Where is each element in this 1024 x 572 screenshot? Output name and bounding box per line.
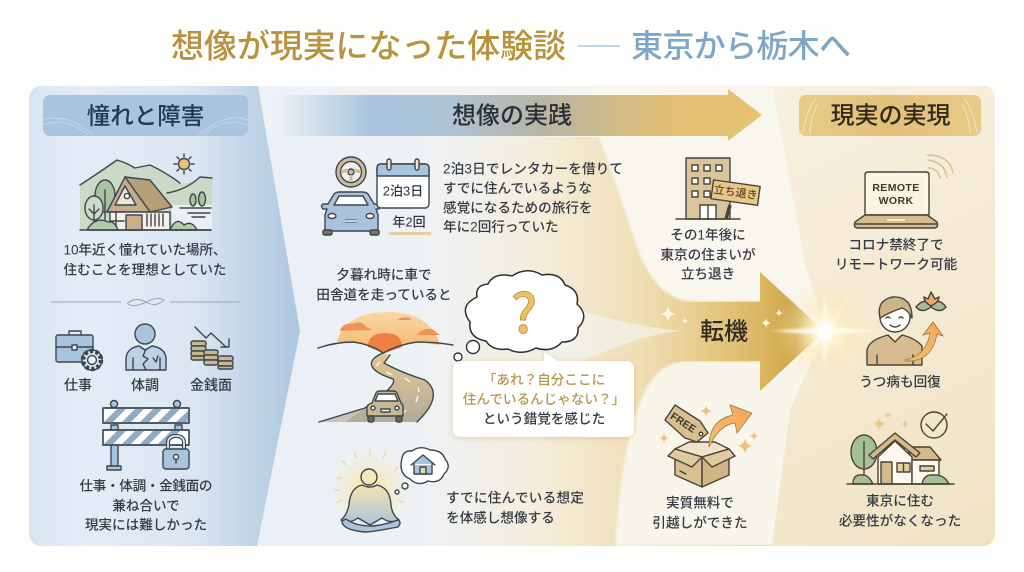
thought cloud with question mark	[454, 270, 584, 361]
text: remote work: コロナ禁終了で	[848, 238, 944, 252]
text: rental car trip	[443, 162, 623, 234]
arrow head over reality panel	[760, 272, 811, 391]
icon: remote work laptop: WORK	[879, 195, 913, 207]
text: free move	[652, 494, 748, 530]
illustration: sunset road	[318, 312, 453, 422]
icon: thatched house	[80, 154, 212, 230]
icon: health	[126, 324, 166, 370]
text: no need for Tokyo: 必要性がなくなった	[839, 512, 961, 528]
text: no need for Tokyo	[839, 494, 961, 528]
icon: meditation	[332, 448, 448, 532]
text: obstacles	[80, 478, 212, 532]
text: dusk drive: 田舎道を走っていると	[316, 288, 452, 302]
label: money: 金銭面	[190, 377, 232, 393]
title dash	[578, 45, 620, 47]
icon: remote work laptop	[854, 155, 953, 228]
panel: background flow	[29, 86, 1000, 546]
text: free move: 引越しができた	[652, 514, 748, 530]
text: obstacles: 仕事・体調・金銭面の	[80, 478, 212, 494]
text: dusk drive	[316, 266, 452, 302]
text: eviction: 立ち退き	[681, 266, 735, 282]
lower light stream	[615, 331, 830, 546]
text: obstacles: 現実には難しかった	[85, 516, 207, 532]
heading arrow: practice of imagining: 想像の実践	[452, 102, 572, 130]
icon: free moving box	[659, 405, 758, 487]
icon: building with eviction sign: 立ち退き	[713, 182, 758, 202]
heading: longing and obstacles	[43, 95, 248, 136]
text: dusk drive: 夕暮れ時に車で	[336, 266, 432, 282]
icon: car and steering wheel	[322, 157, 380, 235]
icon: remote work laptop: REMOTE	[872, 182, 920, 194]
callout: illusion: 「あれ？自分ここに	[483, 372, 605, 388]
callout: illusion: という錯覚を感じた	[483, 410, 605, 426]
panel: reality background	[772, 86, 1000, 546]
ornament divider	[51, 298, 240, 306]
text: rental car trip: 年に2回行っていた	[443, 218, 559, 234]
text: remote work: リモートワーク可能	[835, 257, 958, 272]
heading arrow: practice of imagining	[275, 89, 762, 141]
upper light stream	[598, 137, 822, 324]
centre wedge	[527, 312, 682, 361]
text: eviction: その1年後に	[670, 226, 746, 242]
question mark: ?	[511, 270, 537, 348]
panel: longing background	[29, 86, 300, 546]
icon: calendar: 2泊3日	[383, 184, 423, 198]
arrow: turning point	[678, 272, 811, 391]
text: rental car trip: 感覚になるための旅行を	[443, 200, 593, 216]
title	[171, 28, 851, 64]
title: route: 東京から栃木へ	[631, 28, 851, 64]
icon: money	[191, 327, 233, 369]
text: rental car trip: 2泊3日でレンタカーを借りて	[443, 162, 623, 176]
heading: realization	[799, 95, 981, 136]
title: main: 想像が現実になった体験談	[171, 28, 566, 64]
label: work: 仕事	[64, 377, 92, 393]
icon: work	[56, 331, 102, 370]
label: health: 体調	[131, 377, 159, 393]
callout: illusion: 住んでいるんじゃない？」	[463, 392, 625, 407]
text: obstacles: 兼ね合いで	[112, 498, 180, 514]
text: eviction: 東京の住まいが	[660, 246, 756, 262]
icon: recovered person with flower	[867, 292, 946, 365]
text: imagine living: すでに住んでいる想定	[446, 490, 584, 506]
turning point sparkles	[660, 306, 783, 328]
icon: building with eviction sign	[676, 158, 760, 219]
label: turning point: 転機	[700, 318, 748, 346]
text: no need for Tokyo: 東京に住む	[866, 494, 934, 508]
icon: calendar: 年2回	[392, 214, 426, 230]
icon: barricade with lock	[103, 400, 189, 470]
text: longing: 10年近く憧れていた場所、	[64, 242, 226, 258]
text: recovery: うつ病も回復	[859, 374, 941, 390]
text: longing: 住むことを理想としていた	[64, 262, 226, 278]
heading: longing and obstacles: 憧れと障害	[87, 103, 204, 129]
heading: realization: 現実の実現	[830, 102, 950, 130]
text: rental car trip: すでに住んでいるような	[443, 181, 592, 196]
text: imagine living	[446, 490, 584, 526]
callout: illusion	[453, 352, 634, 437]
icon: calendar	[377, 159, 431, 235]
text: imagine living: を体感し想像する	[446, 510, 555, 526]
text: remote work	[835, 238, 958, 272]
text: eviction	[660, 226, 756, 282]
text: free move: 実質無料で	[666, 494, 734, 510]
text: longing	[64, 242, 226, 278]
starburst	[770, 278, 880, 381]
icon: house with check	[847, 411, 954, 484]
icon: free moving box: FREE	[668, 410, 698, 436]
